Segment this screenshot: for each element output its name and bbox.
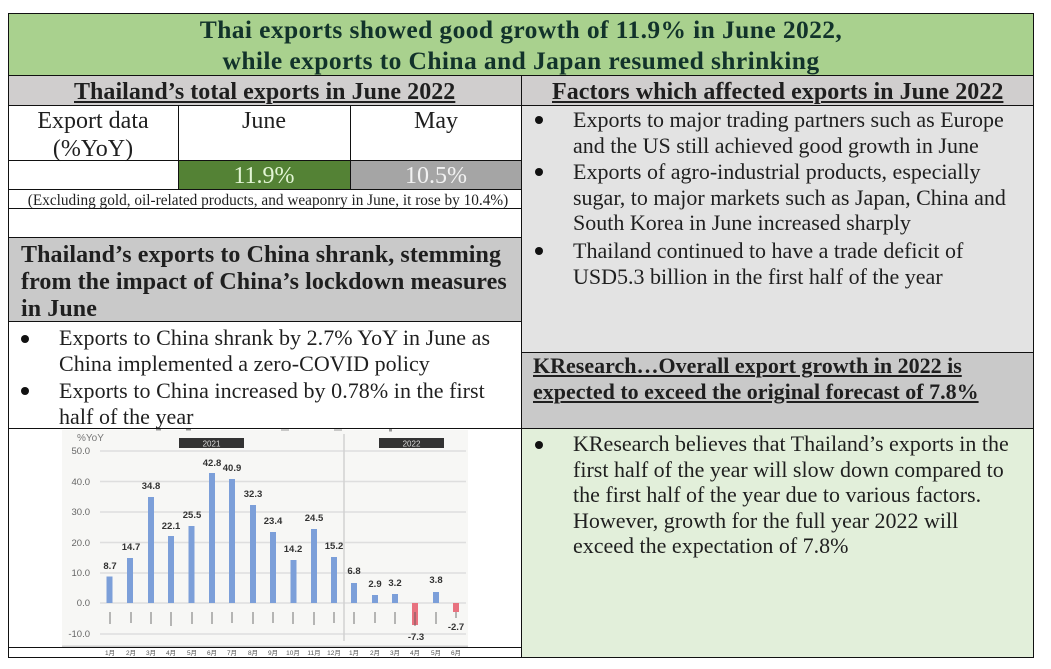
panel: KResearch heading: KResearch…Overall export growth in 2022 is — [533, 353, 962, 378]
panel: total exports heading — [8, 76, 522, 105]
bullet text 1 — [59, 325, 490, 376]
x axis months: 2月 — [126, 649, 136, 657]
value: May 10.5% — [350, 161, 522, 189]
year tag 2021 — [179, 438, 244, 448]
value: May 10.5%: 10.5% — [405, 163, 467, 189]
value labels: 6.8 — [347, 566, 361, 577]
x axis months: 12月 — [327, 649, 341, 657]
column header: May: May — [414, 108, 458, 134]
bullet text 2: Exports to China increased by 0.78% in the first — [59, 378, 485, 403]
panel: KResearch heading: expected to exceed the original forecast of 7.8% — [533, 378, 979, 404]
bullet 2 — [535, 168, 543, 176]
year tag 2021: 2021 — [203, 440, 221, 448]
x axis months: 11月 — [307, 649, 321, 657]
bullet text: exceed the expectation of 7.8% — [573, 533, 848, 558]
bullet text 2: Exports of agro-industrial products, especially — [573, 159, 981, 184]
x axis months: 10月 — [286, 649, 300, 657]
x axis months: 3月 — [390, 649, 400, 657]
value labels: 40.9 — [223, 463, 241, 474]
positive bars — [106, 473, 439, 603]
table: export data — [28, 108, 521, 209]
y axis labels: 10.0 — [72, 568, 90, 579]
value labels: -7.3 — [408, 632, 424, 643]
value labels: 22.1 — [162, 521, 181, 532]
bullet text 1: Exports to China shrank by 2.7% YoY in June as — [59, 325, 490, 350]
note: excluding gold: (Excluding gold, oil-related products, and weaponry in June, it rose by 10.4%) — [28, 192, 508, 209]
panel: China heading: from the impact of China’s lockdown measures — [21, 269, 507, 295]
x axis months: 5月 — [431, 649, 441, 657]
bullet text: However, growth for the full year 2022 will — [573, 508, 958, 532]
bullet — [535, 441, 543, 449]
value labels: 8.7 — [103, 561, 117, 572]
x axis months: 8月 — [248, 649, 258, 657]
label: export data: (%YoY) — [53, 136, 133, 162]
panel: China heading: in June — [21, 296, 97, 322]
x axis months — [105, 649, 461, 657]
bullet text 3: Thailand continued to have a trade deficit of — [573, 238, 963, 263]
bullet text 2 — [59, 378, 485, 428]
year tag 2022 — [379, 438, 444, 448]
y axis labels — [68, 446, 90, 640]
value labels: -2.7 — [448, 622, 464, 633]
x axis months: 1月 — [105, 649, 115, 657]
value labels: 23.4 — [264, 516, 283, 527]
bullet text: KResearch believes that Thailand’s exports in the — [573, 431, 1009, 456]
y axis labels: 0.0 — [77, 598, 90, 609]
rotated month marks under the zero line — [109, 612, 457, 626]
bullet text 2: sugar, to major markets such as Japan, China and — [573, 184, 1006, 210]
y axis labels: 20.0 — [72, 538, 90, 549]
bullet text: first half of the year will slow down compared to — [573, 456, 1004, 482]
value: June 11.9% — [178, 161, 350, 189]
bullet text 1: Exports to major trading partners such as Europe — [573, 107, 1004, 132]
bullet text: the first half of the year due to various factors. — [573, 482, 981, 507]
year tag 2022: 2022 — [403, 440, 421, 448]
y axis labels: -10.0 — [68, 629, 90, 640]
value labels: 14.2 — [284, 544, 302, 555]
title line 1: Thai exports showed good growth of 11.9% in June 2022, — [200, 15, 842, 44]
panel: China heading: Thailand’s exports to China shrank, stemming — [21, 242, 501, 268]
bullet 1 — [21, 335, 29, 343]
panel: total exports heading: Thailand’s total exports in June 2022 — [74, 79, 455, 105]
bullet text 2 — [573, 159, 1006, 235]
negative bars — [412, 603, 459, 625]
panel: China bullets — [21, 325, 490, 428]
bullet text — [573, 431, 1009, 558]
bullet text 2: South Korea in June increased sharply — [573, 210, 911, 235]
value labels: 3.2 — [388, 578, 402, 589]
y axis labels: 40.0 — [72, 477, 90, 488]
x axis months: 7月 — [227, 649, 237, 657]
title banner — [8, 13, 1034, 76]
bullet text 1: China implemented a zero-COVID policy — [59, 350, 430, 376]
x axis months: 1月 — [349, 649, 359, 657]
y axis unit: %YoY — [77, 433, 104, 444]
panel: factors heading: Factors which affected exports in June 2022 — [552, 79, 1003, 105]
value labels: 32.3 — [244, 489, 262, 500]
panel: KResearch heading — [522, 352, 1034, 428]
bullet 1 — [535, 116, 543, 124]
x axis months: 9月 — [268, 649, 278, 657]
panel: KResearch bullets — [522, 428, 1034, 658]
y axis labels: 50.0 — [72, 446, 90, 457]
bullet 3 — [535, 247, 543, 255]
value labels: 15.2 — [325, 541, 343, 552]
x axis months: 4月 — [410, 649, 420, 657]
label: export data — [37, 108, 149, 162]
x axis months: 6月 — [207, 649, 217, 657]
title line 2: while exports to China and Japan resumed shrinking — [223, 46, 819, 75]
value labels: 25.5 — [183, 510, 202, 521]
y axis labels: 30.0 — [72, 507, 90, 518]
bullet 2 — [21, 387, 29, 395]
bullet text 1 — [573, 107, 1004, 158]
value: June 11.9%: 11.9% — [233, 163, 295, 189]
x axis months: 6月 — [451, 649, 461, 657]
value labels: 42.8 — [203, 458, 221, 469]
bullet text 3: USD5.3 billion in the first half of the year — [573, 264, 943, 288]
value labels: 24.5 — [305, 513, 324, 524]
x axis months: 2月 — [370, 649, 380, 657]
x axis months: 5月 — [187, 649, 197, 657]
value labels: 14.7 — [122, 542, 140, 553]
panel: China heading — [8, 237, 522, 321]
value labels: 3.8 — [429, 575, 443, 586]
column header: June: June — [242, 108, 286, 134]
bullet text 1: and the US still achieved good growth in June — [573, 132, 979, 158]
value labels — [103, 458, 464, 643]
panel: factors bullets — [522, 105, 1034, 352]
value labels: 2.9 — [368, 579, 382, 590]
x axis months: 3月 — [146, 649, 156, 657]
value labels: 34.8 — [142, 481, 160, 492]
x axis months: 4月 — [166, 649, 176, 657]
bar chart: export growth %YoY — [62, 429, 468, 657]
bullet text 3 — [573, 238, 964, 288]
label: export data: Export data — [37, 108, 149, 134]
bullet text 2: half of the year — [59, 404, 194, 428]
